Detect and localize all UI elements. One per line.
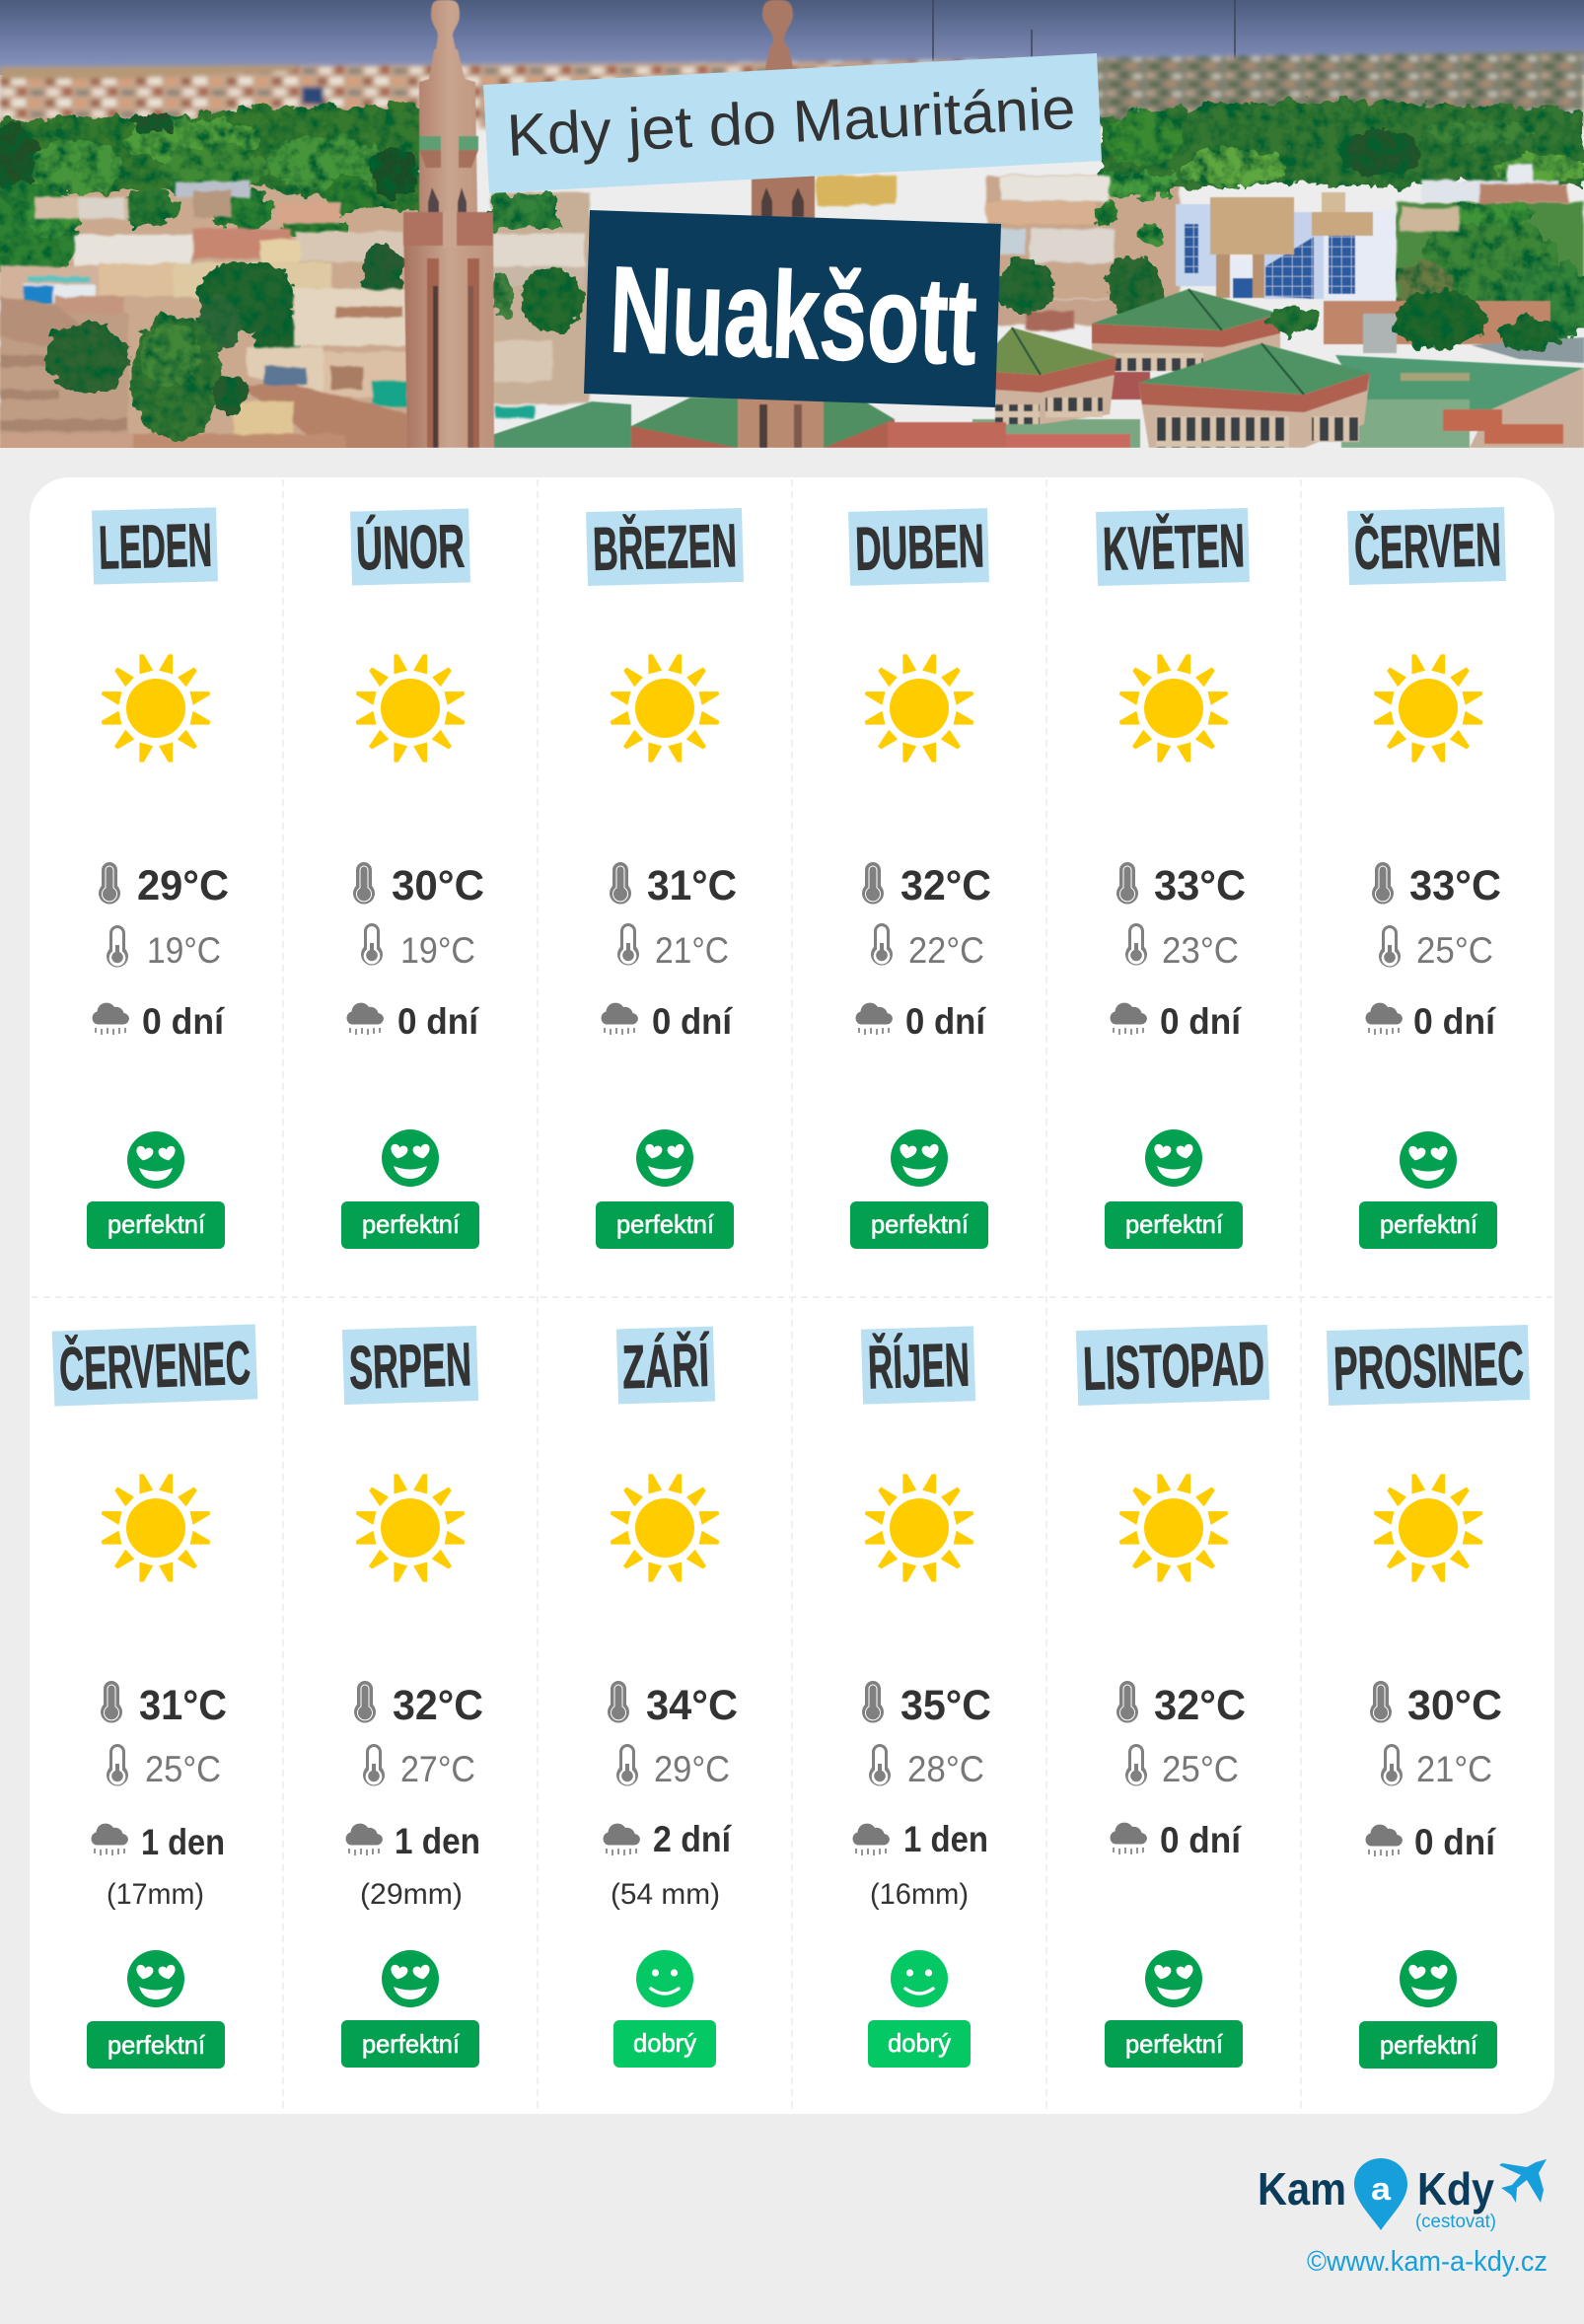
month label: KVĚTEN [1102, 512, 1246, 584]
month label [1076, 1325, 1269, 1406]
low temperature [361, 923, 475, 971]
city banner: Nuakšott [584, 210, 1001, 407]
high temperature: 33°C [1154, 862, 1246, 909]
low wall [1324, 301, 1550, 344]
city banner: Nuakšott: Nuakšott [608, 242, 979, 391]
low temperature: 21°C [655, 930, 729, 971]
rating face [891, 1129, 948, 1187]
month: březen [586, 508, 744, 1249]
rating badge [596, 1201, 734, 1249]
month label: ÚNOR [355, 513, 466, 583]
icon: sun [357, 1475, 464, 1581]
blue building [1176, 204, 1216, 286]
high temperature [353, 862, 484, 909]
rain days [1110, 1001, 1243, 1042]
icon: sun [357, 655, 464, 762]
low temperature [1381, 1744, 1492, 1789]
rating badge: perfektní [871, 1209, 970, 1239]
high temperature [99, 862, 229, 909]
high temperature [862, 1681, 991, 1729]
high temperature [1116, 1681, 1246, 1729]
month label: BŘEZEN [592, 512, 738, 584]
second minaret [762, 0, 794, 73]
high temperature: 32°C [1154, 1682, 1246, 1729]
high temperature: 31°C [139, 1682, 227, 1729]
low temperature: 19°C [400, 930, 475, 971]
low temperature: 19°C [147, 930, 221, 971]
low temperature [1125, 923, 1239, 971]
rating face [127, 1131, 184, 1189]
rating face [1400, 1131, 1457, 1189]
rating badge: perfektní [362, 2029, 461, 2059]
month: duben [848, 508, 991, 1249]
roof pavilion front [1138, 373, 1370, 448]
rating face [636, 1950, 693, 2007]
panel: monthly climate table [30, 477, 1554, 2114]
month label: ZÁŘÍ [621, 1332, 711, 1402]
month: leden [87, 507, 229, 1249]
floors [972, 419, 1140, 448]
rain days: 1 den [141, 1822, 225, 1862]
rain days [92, 1001, 226, 1042]
logo: Kam a Kdy: a [1371, 2171, 1391, 2207]
month label [342, 1326, 478, 1405]
rating face [1145, 1129, 1202, 1187]
high temperature: 33°C [1409, 862, 1501, 909]
high temperature: 30°C [1407, 1682, 1502, 1729]
high temperature: 29°C [137, 862, 229, 909]
bottom center pavilion [631, 398, 895, 448]
rain days: 0 dní [1160, 1001, 1243, 1042]
low temperature: 25°C [145, 1749, 221, 1789]
rating badge [1105, 2020, 1243, 2068]
rainfall amount: (29mm) [360, 1878, 463, 1911]
hero photo: view of Nouakchott with mosque minarets [0, 0, 1584, 454]
high temperature [610, 862, 737, 909]
rain days [1365, 1001, 1497, 1042]
rating face [127, 1950, 184, 2007]
rating badge: perfektní [1380, 2030, 1478, 2060]
high temperature [1372, 862, 1501, 909]
month label: SRPEN [348, 1331, 472, 1403]
rain days: 0 dní [397, 1001, 480, 1042]
rain days: 0 dní [905, 1001, 987, 1042]
low temperature: 25°C [1162, 1749, 1239, 1789]
icon: sun [1120, 1475, 1227, 1581]
low temperature: 28°C [907, 1749, 984, 1789]
rating face [382, 1129, 439, 1187]
high temperature [1116, 862, 1246, 909]
month label [52, 1324, 257, 1407]
rating badge [1359, 2021, 1497, 2069]
rating face [382, 1950, 439, 2007]
low temperature: 25°C [1416, 930, 1493, 971]
low temperature: 22°C [908, 930, 984, 971]
icon: sun [612, 1475, 718, 1581]
flat green roof [1335, 355, 1584, 411]
rain days [1110, 1820, 1243, 1860]
rating badge: perfektní [362, 1209, 461, 1239]
month: srpen [341, 1326, 483, 2068]
low temperature: 29°C [654, 1749, 730, 1789]
rain days [91, 1822, 225, 1862]
month label [848, 508, 989, 586]
low temperature [1125, 1744, 1239, 1789]
rain days: 0 dní [142, 1001, 226, 1042]
low temperature [616, 1744, 730, 1789]
month label [92, 507, 218, 585]
icon: sun [866, 1475, 972, 1581]
rain days [855, 1001, 987, 1042]
month label [1347, 507, 1506, 585]
rating badge [1105, 1201, 1243, 1249]
high temperature: 31°C [647, 862, 737, 909]
icon: sun [1375, 655, 1481, 762]
rating badge [341, 2020, 479, 2068]
rating face [1145, 1950, 1202, 2007]
logo: Kam a Kdy: Kam [1258, 2163, 1346, 2215]
rating badge: perfektní [108, 2030, 206, 2060]
month label: DUBEN [854, 512, 985, 584]
month: říjen [852, 1326, 991, 2068]
green floor bottom left [454, 401, 631, 448]
icon: sun [103, 1475, 209, 1581]
high temperature: 35°C [900, 1682, 991, 1729]
month label: LEDEN [98, 511, 213, 582]
month label: ŘÍJEN [867, 1331, 971, 1402]
rating badge [341, 1201, 479, 1249]
high temperature: 32°C [393, 1682, 483, 1729]
low temperature [871, 923, 984, 971]
month label [616, 1327, 715, 1404]
rainfall amount: (54 mm) [611, 1878, 720, 1911]
month: prosinec [1327, 1325, 1530, 2069]
logo: Kam a Kdy [1258, 2158, 1547, 2232]
month label: LISTOPAD [1082, 1330, 1265, 1404]
rating badge: perfektní [1380, 1209, 1478, 1239]
rain days: 1 den [395, 1821, 480, 1861]
low temperature [363, 1744, 475, 1789]
icon: map pin [1354, 2158, 1407, 2230]
month: září [603, 1327, 738, 2068]
low temperature [617, 923, 729, 971]
roof pavilion back [1091, 333, 1280, 363]
large right trees in front of wall [1266, 291, 1558, 351]
rating badge: dobrý [633, 2028, 696, 2058]
month label [586, 508, 744, 586]
month label: ČERVENEC [58, 1330, 252, 1404]
roof pavilion left [995, 357, 1116, 424]
month label [861, 1326, 975, 1405]
low temperature [107, 1744, 221, 1789]
icon: sun [1375, 1475, 1481, 1581]
month: únor [341, 508, 484, 1249]
rating badge: perfektní [616, 1209, 715, 1239]
rain days: 0 dní [1414, 1822, 1497, 1862]
icon: sun [612, 655, 718, 762]
rainfall amount: (16mm) [870, 1878, 969, 1911]
rating face [1400, 1950, 1457, 2007]
low temperature [107, 925, 221, 971]
rating badge: dobrý [888, 2028, 951, 2058]
month: červen [1347, 507, 1506, 1249]
high temperature [101, 1681, 227, 1729]
low temperature: 23°C [1162, 930, 1239, 971]
month: červenec [52, 1324, 257, 2069]
website address: ©www.kam-a-kdy.cz [1307, 2246, 1548, 2278]
icon: sun [103, 655, 209, 762]
rain days [601, 1001, 734, 1042]
rainfall amount: (17mm) [107, 1878, 204, 1911]
high temperature [354, 1681, 483, 1729]
rain days [1365, 1822, 1497, 1862]
month: květen [1096, 508, 1250, 1249]
rating badge [850, 1201, 988, 1249]
icon: sun [866, 655, 972, 762]
rain days: 0 dní [652, 1001, 734, 1042]
rain days: 1 den [903, 1819, 988, 1859]
rain days [345, 1821, 480, 1861]
rating badge [1359, 1201, 1497, 1249]
logo: Kam a Kdy: Kdy [1417, 2163, 1494, 2215]
rain days: 2 dní [653, 1819, 733, 1859]
center strip beside banners [491, 164, 1568, 418]
rating badge: perfektní [108, 1209, 206, 1239]
title banner: Kdy jet do Mauritánie [483, 53, 1102, 193]
rating badge [613, 2020, 716, 2068]
rating face [636, 1129, 693, 1187]
high temperature [608, 1681, 738, 1729]
low temperature: 21°C [1416, 1749, 1492, 1789]
icon: sun [1120, 655, 1227, 762]
rain days [346, 1001, 480, 1042]
low temperature [1379, 925, 1493, 971]
logo: Kam a Kdy: (cestovat) [1415, 2212, 1496, 2232]
rain days: 0 dní [1160, 1820, 1243, 1860]
rain days [603, 1819, 733, 1859]
rating badge: perfektní [1125, 2029, 1224, 2059]
month label [1096, 508, 1250, 586]
rain days: 0 dní [1413, 1001, 1497, 1042]
low temperature: 27°C [400, 1749, 475, 1789]
low temperature [869, 1744, 984, 1789]
rating badge [868, 2020, 971, 2068]
rain days [852, 1819, 988, 1859]
rating face [891, 1950, 948, 2007]
icon: airplane [1499, 2159, 1547, 2203]
month: listopad [1076, 1325, 1269, 2068]
month label [350, 508, 470, 586]
high temperature: 32°C [900, 862, 991, 909]
rating badge [87, 2021, 225, 2069]
high temperature: 34°C [646, 1682, 738, 1729]
rating badge: perfektní [1125, 1209, 1224, 1239]
rating badge [87, 1201, 225, 1249]
high temperature [862, 862, 991, 909]
left minaret [403, 0, 494, 448]
title banner: Kdy jet do Mauritánie: Kdy jet do Mauritánie [505, 75, 1077, 169]
high temperature: 30°C [392, 862, 484, 909]
